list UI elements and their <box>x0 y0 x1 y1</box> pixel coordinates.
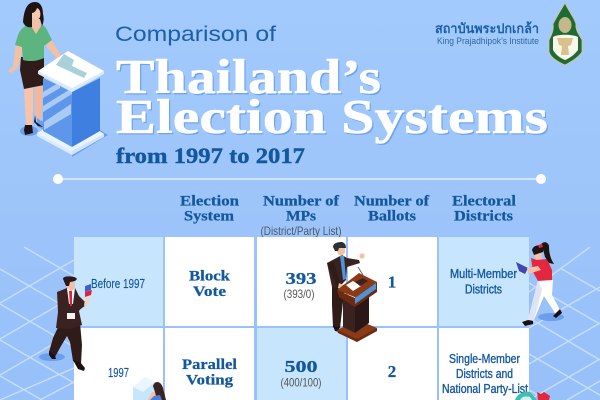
institute name: King Prajadhipok’s Institute <box>437 36 539 47</box>
title: Thailand's Election Systems: Election Systems <box>118 90 550 146</box>
icon: woman casting vote at ballot box <box>8 2 108 157</box>
table row: Before 1997: Before 1997 <box>91 277 145 291</box>
table row: 1997: Districts and <box>456 367 513 381</box>
table row: Before 1997: Districts <box>465 282 502 296</box>
table row: 1997: Voting <box>186 372 234 388</box>
column headers: Ballots <box>368 208 416 224</box>
title: Thailand's Election Systems <box>116 49 550 146</box>
column headers <box>180 194 516 224</box>
column headers: MPs <box>286 208 316 224</box>
table row: 1997: Parallel <box>182 357 237 373</box>
icon: woman holding folder <box>516 242 564 326</box>
institute name: สถาบันพระปกเกล้า <box>435 21 539 36</box>
institute name <box>435 21 539 47</box>
table row: Before 1997: Multi-Member <box>450 267 517 281</box>
column note: District/Party List: (District/Party List) <box>260 224 342 238</box>
table row: Before 1997: (393/0) <box>284 287 314 301</box>
subtitle: from 1997 to 2017: from 1997 to 2017 <box>116 143 305 168</box>
table row: 1997: (400/100) <box>280 376 322 390</box>
table row: 1997: Single-Member <box>449 352 520 366</box>
table row: Before 1997: 1 <box>388 272 396 292</box>
table row: Before 1997: 393 <box>286 269 316 288</box>
column headers: Election <box>180 194 239 210</box>
icon: man holding ballot <box>39 276 92 371</box>
column headers: Number of <box>263 194 339 210</box>
column headers: Number of <box>354 194 429 210</box>
title: Thailand's Election Systems: Thailand’s <box>116 49 381 104</box>
column headers: System <box>184 208 234 224</box>
icon: woman at ballot box, bottom of table <box>133 377 166 400</box>
table row: Before 1997: Block <box>189 268 231 284</box>
icon: speaker at podium <box>327 242 377 342</box>
icon: institute emblem <box>549 3 582 65</box>
table row: Before 1997: Vote <box>193 284 227 300</box>
column headers: Electoral <box>452 194 516 210</box>
table row: 1997: 1997 <box>108 366 129 380</box>
icon: partial figure, bottom right <box>515 392 550 400</box>
table row: 1997 <box>74 328 529 400</box>
title: Thailand's Election Systems: Thailand’s <box>118 50 382 106</box>
column headers: Districts <box>454 208 513 224</box>
table row: 1997: 500 <box>284 357 318 376</box>
divider line with end dots <box>53 174 546 184</box>
heading: Comparison of: Comparison of <box>115 22 276 46</box>
table row: 1997: 2 <box>388 362 396 381</box>
table row: Before 1997 <box>74 237 529 326</box>
table row: 1997: National Party-List <box>442 382 528 396</box>
title: Thailand's Election Systems: Election Systems <box>116 89 548 144</box>
